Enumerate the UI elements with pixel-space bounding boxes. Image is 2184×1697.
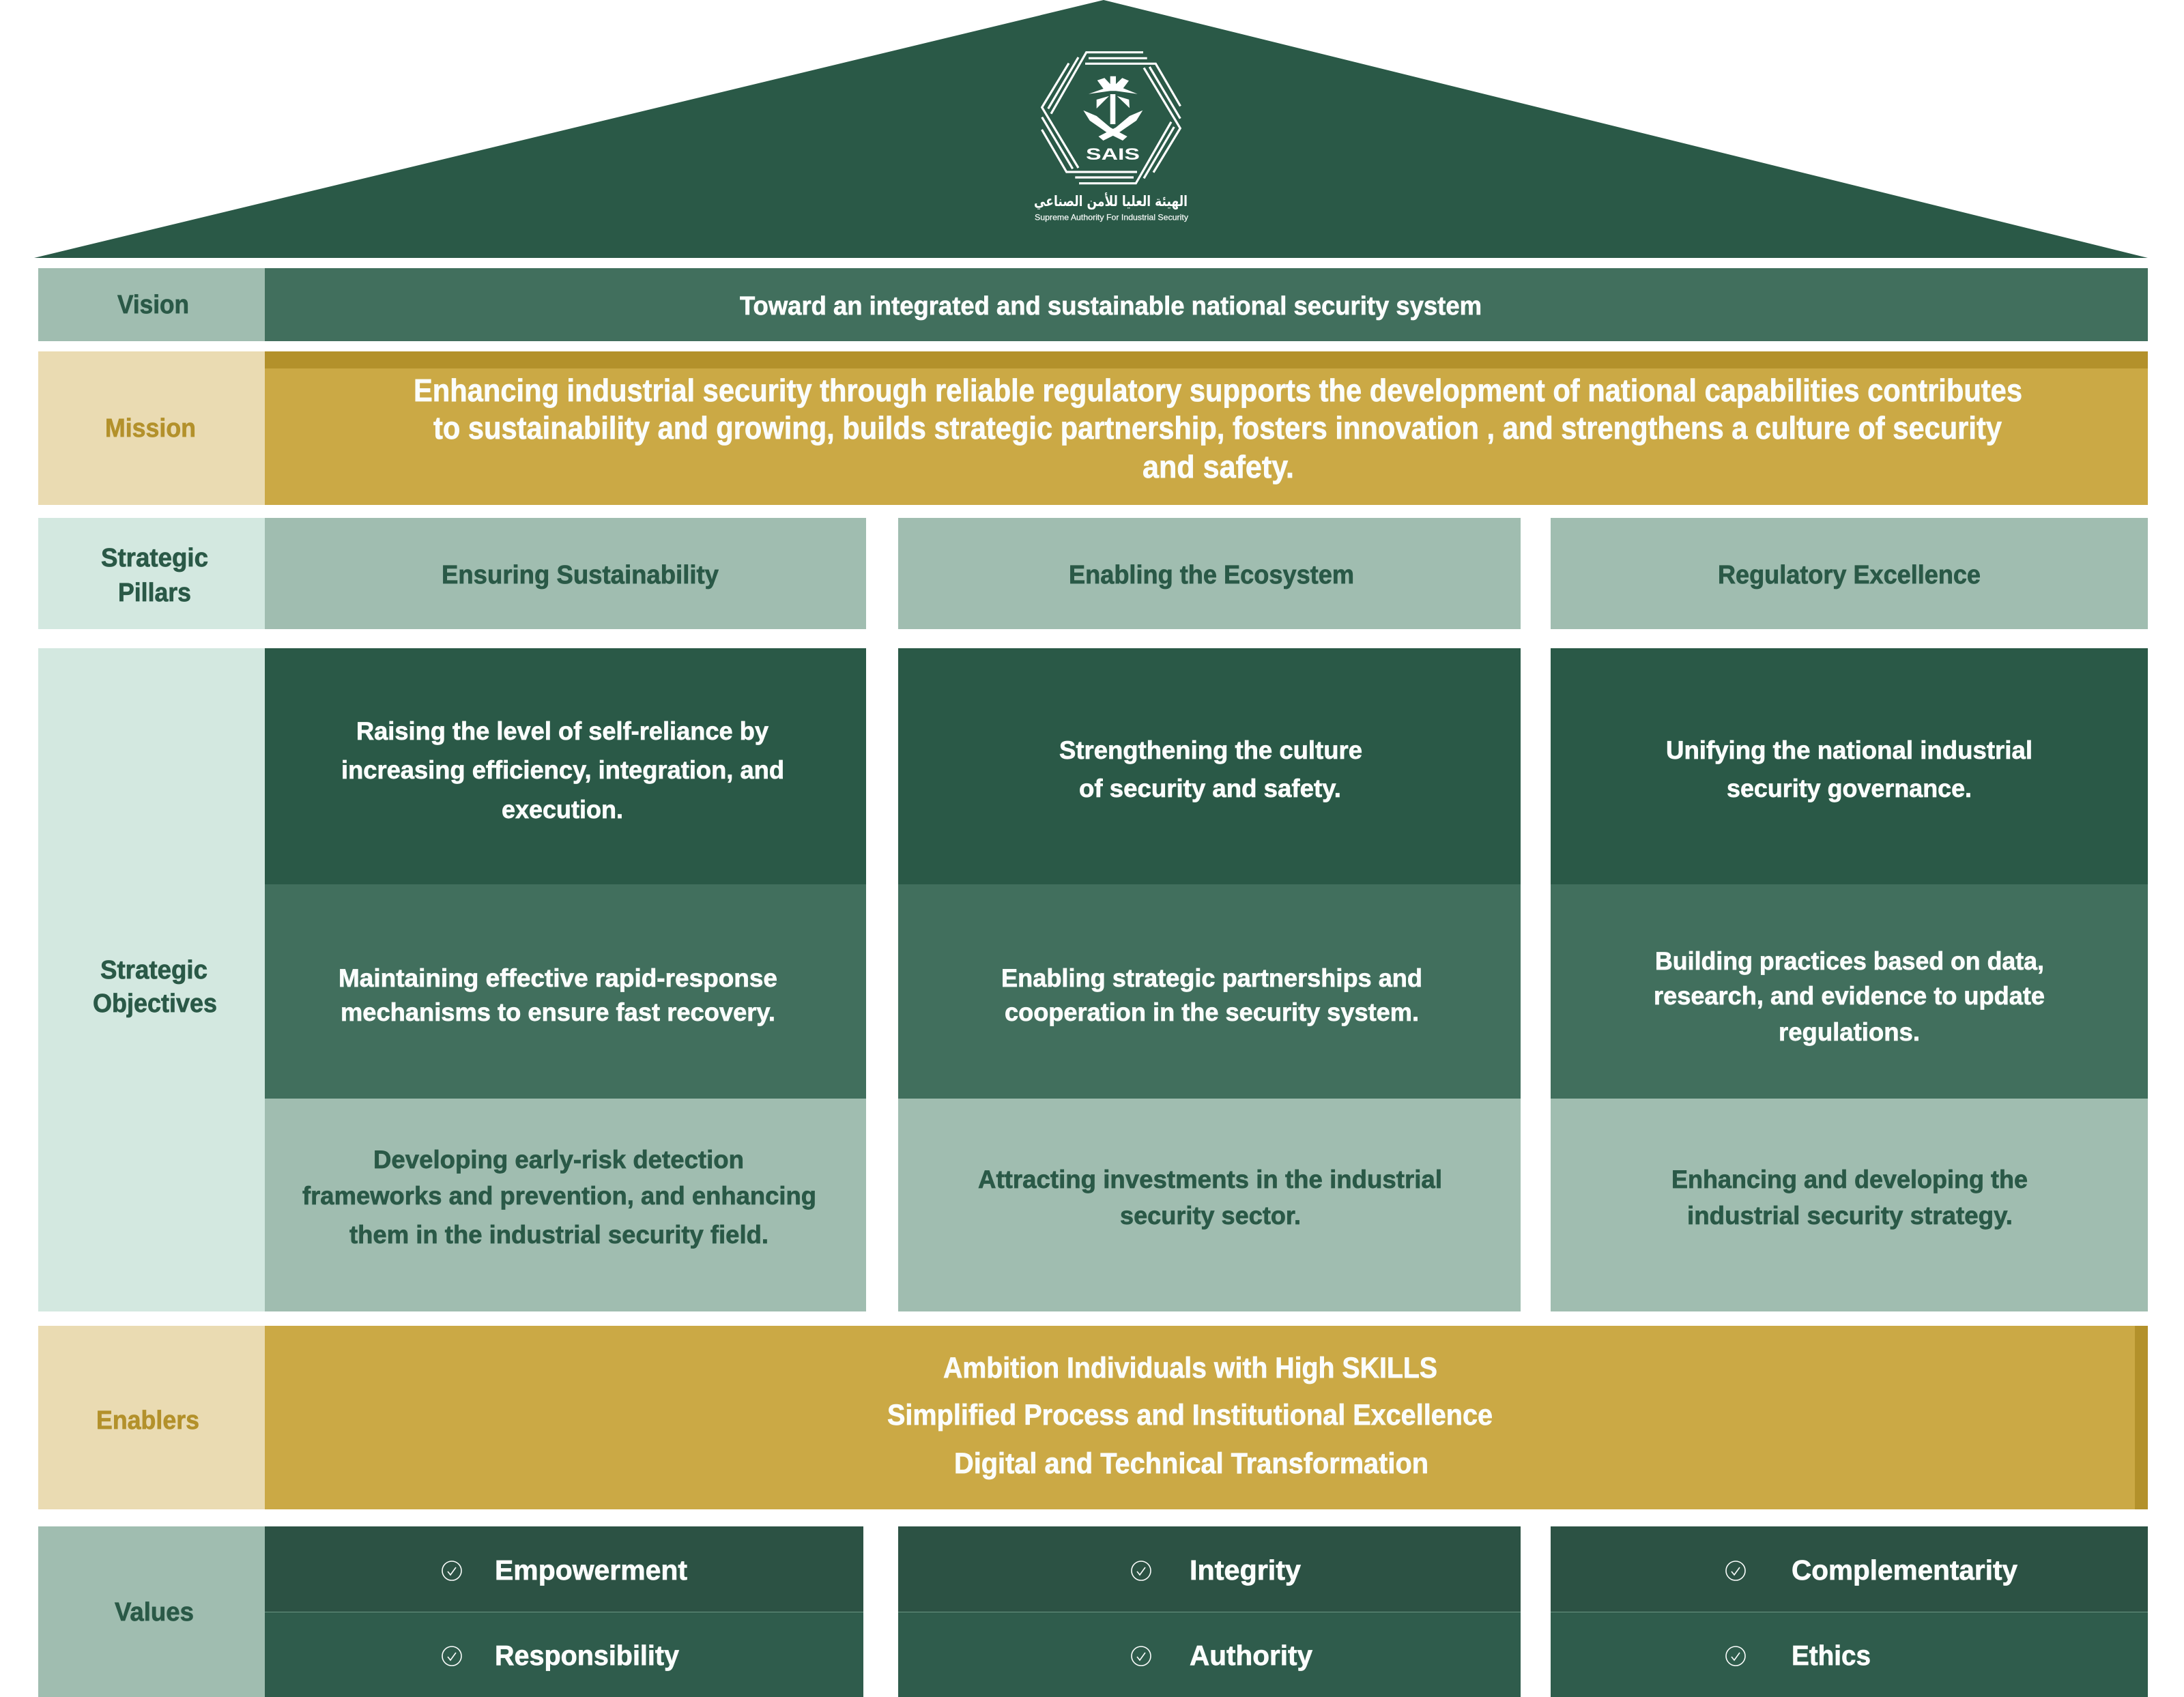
panel: enablers — [38, 1326, 2148, 1509]
panel: mission — [38, 351, 2148, 505]
mission statement — [414, 373, 2022, 484]
values column 2: Integrity — [1190, 1554, 1301, 1586]
objective: self-reliance: Raising the level of self-reliance by — [356, 717, 768, 745]
values column 3: Complementarity — [1792, 1554, 2017, 1586]
icon: SAIS logo — [1041, 53, 1181, 184]
objective: unifying governance: Unifying the national industrial — [1666, 736, 2032, 764]
objective: data and evidence: regulations. — [1779, 1018, 1920, 1046]
objective: partnerships: Enabling strategic partnerships and — [1001, 964, 1422, 992]
objective: early-risk detection: them in the industrial security field. — [349, 1221, 768, 1249]
values column 1: Responsibility — [495, 1640, 679, 1671]
objective: early-risk detection: frameworks and prevention, and enhancing — [302, 1182, 816, 1210]
panel: values — [38, 1526, 2148, 1697]
mission statement: Enhancing industrial security through reliable regulatory supports the development of national capabilities contributes — [414, 373, 2022, 408]
objective: rapid response: Maintaining effective rapid-response — [339, 964, 777, 992]
values column 1 — [265, 1526, 863, 1697]
values label: Values — [115, 1598, 194, 1627]
objective: strategy development: Enhancing and developing the — [1671, 1165, 2028, 1193]
icon: check — [1726, 1561, 1745, 1580]
pillar: Regulatory Excellence: Regulatory Excellence — [1718, 561, 1981, 590]
pillar: Enabling the Ecosystem — [898, 518, 1521, 629]
objective: culture of security: of security and safety. — [1079, 774, 1341, 802]
pillars label: Strategic — [101, 544, 208, 572]
values column 2: Authority — [1190, 1640, 1312, 1671]
objective: investments — [898, 1099, 1521, 1311]
objective: self-reliance — [265, 648, 866, 884]
panel: strategic objectives — [38, 648, 2148, 1311]
pillar: Regulatory Excellence — [1551, 518, 2148, 629]
pillar: Enabling the Ecosystem: Enabling the Ecosystem — [1069, 561, 1354, 590]
icon: check — [1726, 1647, 1745, 1666]
pillars label: Pillars — [118, 579, 191, 607]
vision statement: Toward an integrated and sustainable national security system — [740, 292, 1482, 321]
enablers list: Ambition Individuals with High SKILLS — [943, 1352, 1437, 1384]
objective: strategy development — [1551, 1099, 2148, 1311]
vision label: Vision — [117, 291, 189, 319]
values column 2 — [898, 1526, 1521, 1697]
objective: early-risk detection — [265, 1099, 866, 1311]
enablers list: Simplified Process and Institutional Excellence — [887, 1399, 1493, 1432]
icon: check — [1132, 1647, 1151, 1666]
panel: strategic pillars — [38, 518, 2148, 629]
enablers label: Enablers — [96, 1406, 199, 1435]
objective: culture of security: Strengthening the culture — [1059, 736, 1362, 764]
enablers list: Digital and Technical Transformation — [954, 1447, 1428, 1480]
logo English name: Supreme Authority For Industrial Security — [1035, 213, 1188, 222]
objectives label: Strategic — [100, 956, 207, 985]
enablers list — [887, 1352, 1493, 1480]
objective: rapid response: mechanisms to ensure fast recovery. — [341, 998, 775, 1026]
objective: data and evidence: research, and evidence to update — [1654, 982, 2045, 1010]
objectives label — [93, 956, 217, 1018]
objective: investments: Attracting investments in the industrial — [978, 1165, 1442, 1193]
objective: rapid response — [265, 884, 866, 1099]
panel: vision — [38, 268, 2148, 341]
objective: self-reliance: execution. — [502, 796, 623, 824]
icon: check — [442, 1561, 461, 1580]
objective: partnerships — [898, 884, 1521, 1099]
pillars label — [101, 544, 208, 607]
logo Arabic name: الهيئة العليا للأمن الصناعي — [1034, 192, 1188, 209]
mission statement: and safety. — [1143, 449, 1294, 484]
values column 3 — [1551, 1526, 2148, 1697]
mission label: Mission — [105, 414, 196, 443]
objective: culture of security — [898, 648, 1521, 884]
icon: check — [1132, 1561, 1151, 1580]
values column 1: Empowerment — [495, 1554, 687, 1586]
pillar: Ensuring Sustainability: Ensuring Sustainability — [442, 561, 719, 590]
roof with logo — [34, 0, 2148, 258]
objective: early-risk detection: Developing early-risk detection — [373, 1146, 744, 1174]
objective: self-reliance: increasing efficiency, integration, and — [341, 756, 784, 784]
mission statement: to sustainability and growing, builds strategic partnership, fosters innovation , and strengthens a culture of security — [433, 410, 2002, 446]
logo wordmark: SAIS — [1086, 145, 1140, 164]
objective: unifying governance — [1551, 648, 2148, 884]
objective: strategy development: industrial security strategy. — [1687, 1202, 2013, 1230]
objective: investments: security sector. — [1120, 1202, 1301, 1230]
objective: unifying governance: security governance. — [1727, 774, 1972, 802]
icon: check — [442, 1647, 461, 1666]
pillar: Ensuring Sustainability — [265, 518, 866, 629]
objective: data and evidence — [1551, 884, 2148, 1099]
values column 3: Ethics — [1792, 1640, 1871, 1671]
objective: partnerships: cooperation in the security system. — [1005, 998, 1419, 1026]
objectives label: Objectives — [93, 989, 217, 1018]
objective: data and evidence: Building practices based on data, — [1655, 947, 2044, 975]
